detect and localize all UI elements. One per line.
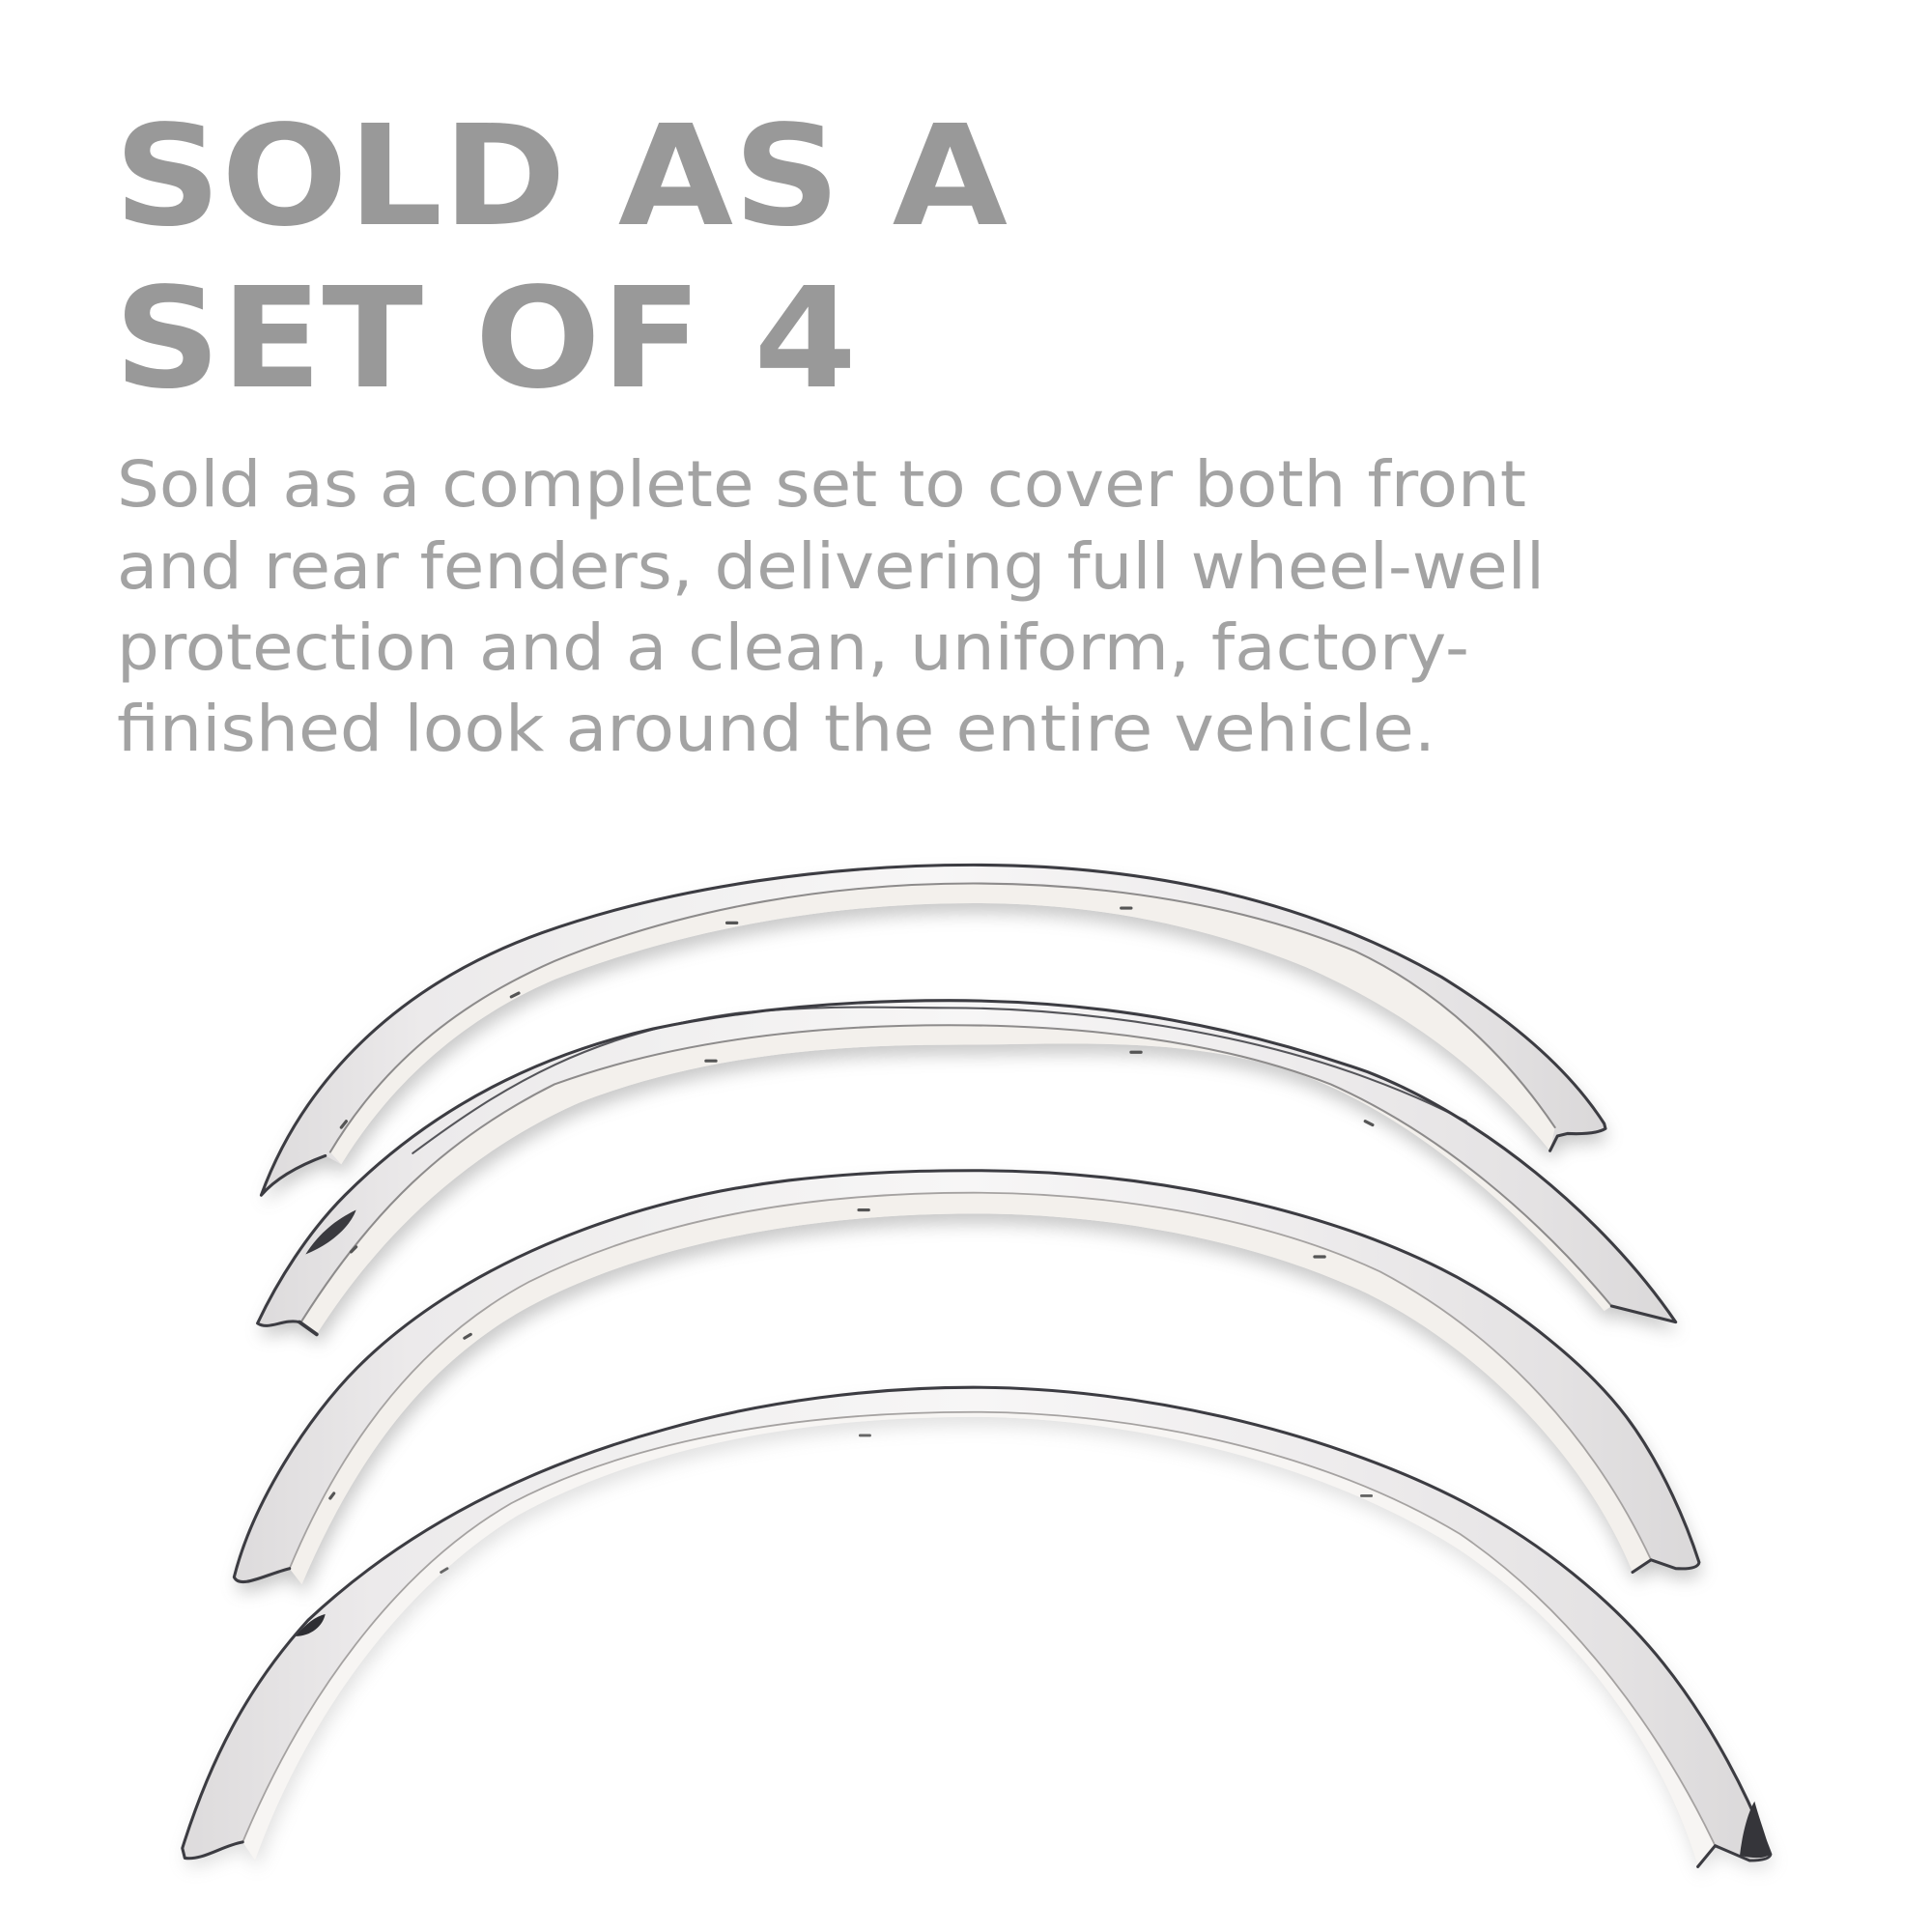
description text: finished look around the entire vehicle. (117, 692, 1435, 766)
description text: and rear fenders, delivering full wheel-well (117, 529, 1545, 604)
description text (117, 447, 1545, 766)
description text: protection and a clean, uniform, factory- (117, 611, 1469, 685)
set of four fender trims (183, 865, 1773, 1875)
title: SET OF 4 (114, 257, 857, 419)
fender trim 3 (234, 1171, 1701, 1594)
title (114, 95, 1008, 419)
fender trim 1 (261, 865, 1608, 1205)
fender trim 4 (183, 1387, 1773, 1875)
fender trim 2 (258, 1001, 1678, 1345)
title: SOLD AS A (114, 95, 1008, 257)
description text: Sold as a complete set to cover both front (117, 447, 1526, 522)
